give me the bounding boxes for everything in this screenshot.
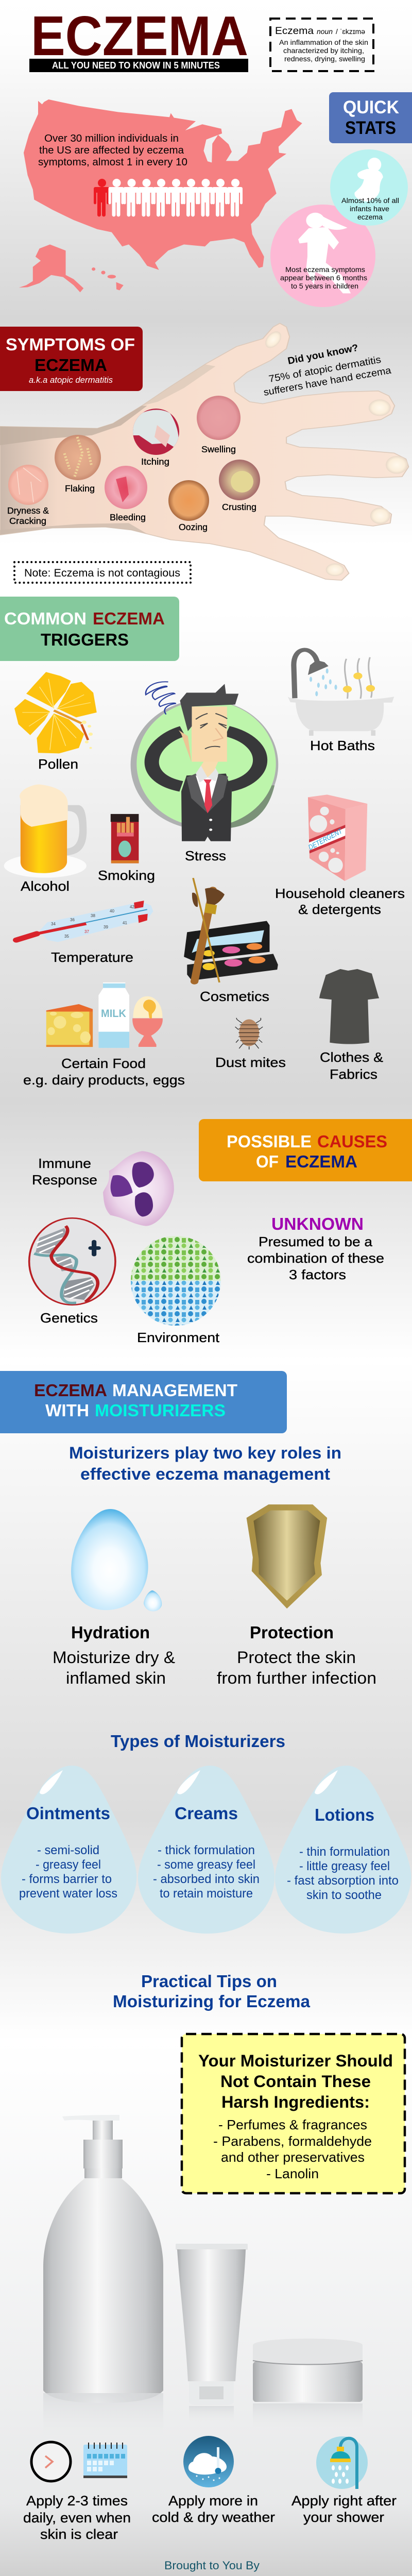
cause: environment: Environment xyxy=(137,1330,220,1345)
trigger: detergent xyxy=(275,794,405,917)
trigger: temperature: 41 xyxy=(123,921,127,925)
photo: crusting xyxy=(219,460,260,500)
stat bubble: children xyxy=(270,205,375,307)
text: unknown causes xyxy=(247,1215,384,1282)
trigger: temperature: Temperature xyxy=(51,950,133,965)
illustration: hand with symptoms: Itching xyxy=(141,456,169,467)
photo: dryness xyxy=(8,465,48,505)
heading: practical tips: Moisturizing for Eczema xyxy=(113,1992,311,2011)
type: ointments: - greasy feel xyxy=(36,1858,101,1872)
trigger: certain food: Certain Food xyxy=(61,1056,146,1071)
tip: apply 2-3 times daily: skin is clear xyxy=(40,2527,118,2542)
trigger: temperature: 38 xyxy=(91,913,95,918)
trigger: dust mites xyxy=(215,1018,286,1070)
panel: symptoms heading: SYMPTOMS OF xyxy=(6,335,135,354)
illustration: hand with symptoms: Dryness & xyxy=(7,505,49,516)
note: not contagious xyxy=(14,562,191,583)
illustration: tube xyxy=(176,2244,248,2422)
stat bubble: infants: eczema xyxy=(357,213,383,221)
type: lotions: - thin formulation xyxy=(299,1845,390,1859)
title: ECZEMA: ECZEMA xyxy=(31,5,248,67)
role: hydration xyxy=(53,1509,175,1687)
illustration: hand with symptoms: Flaking xyxy=(65,483,95,494)
trigger: clothes and fabrics xyxy=(319,969,383,1082)
type: creams: - some greasy feel xyxy=(157,1858,255,1872)
tip: apply right after shower: Apply right after xyxy=(291,2493,397,2509)
callout: harsh ingredients: Harsh Ingredients: xyxy=(221,2093,370,2111)
stat bubble: children: Most eczema symptoms xyxy=(285,265,365,274)
role: protection: from further infection xyxy=(217,1669,376,1687)
callout: harsh ingredients: - Lanolin xyxy=(266,2166,319,2181)
definition box: characterized by itching, xyxy=(283,46,364,55)
cause: genetics: Genetics xyxy=(40,1310,98,1326)
definition box: redness, drying, swelling xyxy=(284,55,365,63)
trigger: detergent: Household cleaners xyxy=(275,886,405,901)
panel: management heading: WITH xyxy=(45,1401,89,1420)
panel: symptoms heading: a.k.a atopic dermatitis xyxy=(29,375,113,385)
photo: oozing xyxy=(168,480,209,521)
type: ointments xyxy=(1,1766,136,1934)
type: creams xyxy=(138,1766,274,1934)
callout: harsh ingredients: and other preservatives xyxy=(221,2149,365,2165)
type: creams: - absorbed into skin xyxy=(153,1872,260,1886)
stat bubble: infants: infants have xyxy=(350,205,389,213)
trigger: pollen xyxy=(14,672,97,772)
trigger: temperature: 34 xyxy=(51,922,56,926)
type: ointments: prevent water loss xyxy=(19,1887,117,1901)
heading: two key roles: Moisturizers play two key roles in xyxy=(69,1444,341,1462)
photo: swelling xyxy=(197,396,241,440)
heading: two key roles xyxy=(69,1444,341,1483)
stat bubble: children: appear between 6 months xyxy=(280,274,367,282)
trigger: alcohol xyxy=(4,785,87,894)
panel: management heading: ECZEMA xyxy=(34,1381,107,1400)
text: brought to you by: Brought to You By xyxy=(164,2559,260,2572)
trigger: stress: Stress xyxy=(185,848,226,863)
panel: quick stats heading: STATS xyxy=(345,118,396,138)
panel: common triggers heading xyxy=(0,597,179,661)
illustration: hand with symptoms: Crusting xyxy=(222,502,256,512)
trigger: detergent: DETERGENT xyxy=(307,826,344,852)
type: ointments: Ointments xyxy=(26,1804,110,1823)
title: ECZEMA: ALL YOU NEED TO KNOW IN 5 MINUTES xyxy=(52,60,220,71)
callout: did you know: 75% of atopic dermatitis xyxy=(268,354,382,385)
heading: types of moisturizers: Types of Moisturizers xyxy=(111,1732,285,1751)
panel: symptoms heading: ECZEMA xyxy=(35,356,107,375)
photo: bleeding xyxy=(105,466,147,509)
trigger: dust mites: Dust mites xyxy=(215,1055,286,1070)
illustration: hand with symptoms xyxy=(0,324,408,580)
panel: management heading xyxy=(0,1371,287,1433)
stat bubble: infants xyxy=(330,149,408,226)
type: lotions: - fast absorption into xyxy=(287,1874,399,1888)
heading: practical tips xyxy=(113,1972,311,2011)
note: not contagious: Note: Eczema is not contagious xyxy=(24,567,180,579)
map of the USA: Over 30 million individuals in xyxy=(44,132,179,144)
trigger: temperature xyxy=(16,901,153,965)
heading: two key roles: effective eczema management xyxy=(80,1465,330,1483)
text: unknown causes: UNKNOWN xyxy=(271,1215,364,1234)
type: creams: to retain moisture xyxy=(160,1887,253,1901)
text: unknown causes: 3 factors xyxy=(289,1267,346,1282)
illustration: hand with symptoms: Cracking xyxy=(9,516,46,526)
role: hydration: Moisturize dry & xyxy=(53,1648,175,1667)
trigger: clothes and fabrics: Clothes & xyxy=(320,1049,383,1065)
illustration: hand with symptoms: Oozing xyxy=(179,522,208,532)
definition box: / ˈɛkzɪmə xyxy=(336,28,365,36)
trigger: temperature: 40 xyxy=(110,909,114,913)
panel: management heading: MANAGEMENT xyxy=(112,1381,238,1400)
trigger: smoking: Smoking xyxy=(98,868,155,883)
type: creams: Creams xyxy=(175,1804,238,1823)
map of the USA: the US are affected by eczema xyxy=(39,144,184,156)
panel: common triggers heading: COMMON xyxy=(4,609,87,629)
panel: quick stats heading: QUICK xyxy=(343,97,399,117)
role: hydration: Hydration xyxy=(71,1623,150,1642)
photo: flaking xyxy=(55,435,101,480)
panel: quick stats heading xyxy=(329,92,412,143)
tip: apply 2-3 times daily xyxy=(23,2442,131,2542)
panel: symptoms heading xyxy=(0,327,143,391)
tip: apply right after shower: your shower xyxy=(303,2510,384,2525)
callout: harsh ingredients: Not Contain These xyxy=(220,2072,371,2091)
tip: apply more in cold weather xyxy=(152,2436,275,2525)
photo: itching xyxy=(133,409,179,455)
trigger: temperature: 36 xyxy=(70,918,75,922)
cause: immune response: Response xyxy=(32,1172,97,1188)
stat bubble: infants: Almost 10% of all xyxy=(341,196,399,205)
trigger: hot baths: Hot Baths xyxy=(310,738,375,753)
callout: harsh ingredients xyxy=(182,2034,405,2193)
trigger: temperature: 42 xyxy=(130,905,134,909)
cause: immune response: Immune xyxy=(38,1156,91,1171)
panel: possible causes heading: CAUSES xyxy=(317,1132,387,1151)
type: creams: - thick formulation xyxy=(158,1843,255,1857)
definition box: noun xyxy=(317,28,333,36)
callout: harsh ingredients: - Parabens, formaldehyde xyxy=(213,2133,372,2149)
trigger: temperature: 37 xyxy=(84,929,89,934)
trigger: temperature: 39 xyxy=(104,925,108,929)
trigger: stress xyxy=(131,682,278,863)
illustration: pump bottle xyxy=(43,2115,163,2437)
cause: genetics xyxy=(29,1218,115,1326)
callout: harsh ingredients: Your Moisturizer Should xyxy=(198,2052,393,2070)
tip: apply 2-3 times daily: Apply 2-3 times xyxy=(26,2493,128,2509)
panel: management heading: MOISTURIZERS xyxy=(95,1401,226,1420)
type: lotions xyxy=(275,1766,411,1934)
trigger: clothes and fabrics: Fabrics xyxy=(330,1066,377,1082)
definition box xyxy=(270,19,373,71)
trigger: smoking xyxy=(98,814,155,883)
illustration: hand with symptoms: Swelling xyxy=(201,444,236,454)
role: hydration: inflamed skin xyxy=(66,1669,166,1687)
trigger: cosmetics xyxy=(184,878,278,1004)
illustration: hand with symptoms: Bleeding xyxy=(110,512,146,522)
panel: possible causes heading: ECZEMA xyxy=(285,1153,357,1172)
cause: environment xyxy=(131,1236,221,1345)
illustration: jar xyxy=(253,2338,363,2428)
definition box: An inflammation of the skin xyxy=(279,38,368,46)
trigger: certain food: e.g. dairy products, eggs xyxy=(23,1072,185,1088)
trigger: cosmetics: Cosmetics xyxy=(200,989,269,1004)
panel: possible causes heading: OF xyxy=(256,1153,279,1172)
cause: immune response xyxy=(32,1151,174,1226)
trigger: certain food: MILK xyxy=(101,1008,126,1020)
trigger: temperature: 35 xyxy=(64,934,69,939)
panel: common triggers heading: ECZEMA xyxy=(93,609,165,629)
callout: did you know: Did you know? xyxy=(287,343,359,367)
role: protection xyxy=(217,1504,376,1687)
callout: harsh ingredients: - Perfumes & fragrances xyxy=(218,2117,367,2132)
role: protection: Protection xyxy=(250,1623,334,1642)
map of the USA xyxy=(19,99,302,292)
panel: common triggers heading: TRIGGERS xyxy=(41,631,129,650)
trigger: certain food xyxy=(23,982,185,1088)
trigger: detergent: & detergents xyxy=(298,902,381,917)
type: lotions: skin to soothe xyxy=(306,1888,382,1902)
trigger: alcohol: Alcohol xyxy=(21,878,70,894)
trigger: hot baths xyxy=(288,650,394,753)
text: unknown causes: Presumed to be a xyxy=(259,1234,373,1249)
callout: did you know: sufferers have hand eczema xyxy=(263,365,392,398)
callout: did you know xyxy=(263,343,392,398)
panel: possible causes heading xyxy=(199,1119,412,1181)
type: lotions: - little greasy feel xyxy=(299,1859,390,1873)
tip: apply more in cold weather: Apply more in xyxy=(168,2493,258,2509)
tip: apply 2-3 times daily: daily, even when xyxy=(23,2510,131,2526)
type: lotions: Lotions xyxy=(315,1805,374,1824)
trigger: pollen: Pollen xyxy=(38,756,78,772)
type: ointments: - semi-solid xyxy=(37,1843,99,1857)
tip: apply right after shower xyxy=(291,2436,397,2525)
heading: practical tips: Practical Tips on xyxy=(141,1972,277,1991)
map of the USA: symptoms, almost 1 in every 10 xyxy=(38,156,187,168)
tip: apply more in cold weather: cold & dry weather xyxy=(152,2510,275,2525)
type: ointments: - forms barrier to xyxy=(22,1872,112,1886)
text: unknown causes: combination of these xyxy=(247,1250,384,1266)
panel: possible causes heading: POSSIBLE xyxy=(227,1132,312,1151)
stat bubble: children: to 5 years in children xyxy=(291,282,358,290)
definition box: Eczema xyxy=(275,25,314,37)
role: protection: Protect the skin xyxy=(237,1648,356,1667)
